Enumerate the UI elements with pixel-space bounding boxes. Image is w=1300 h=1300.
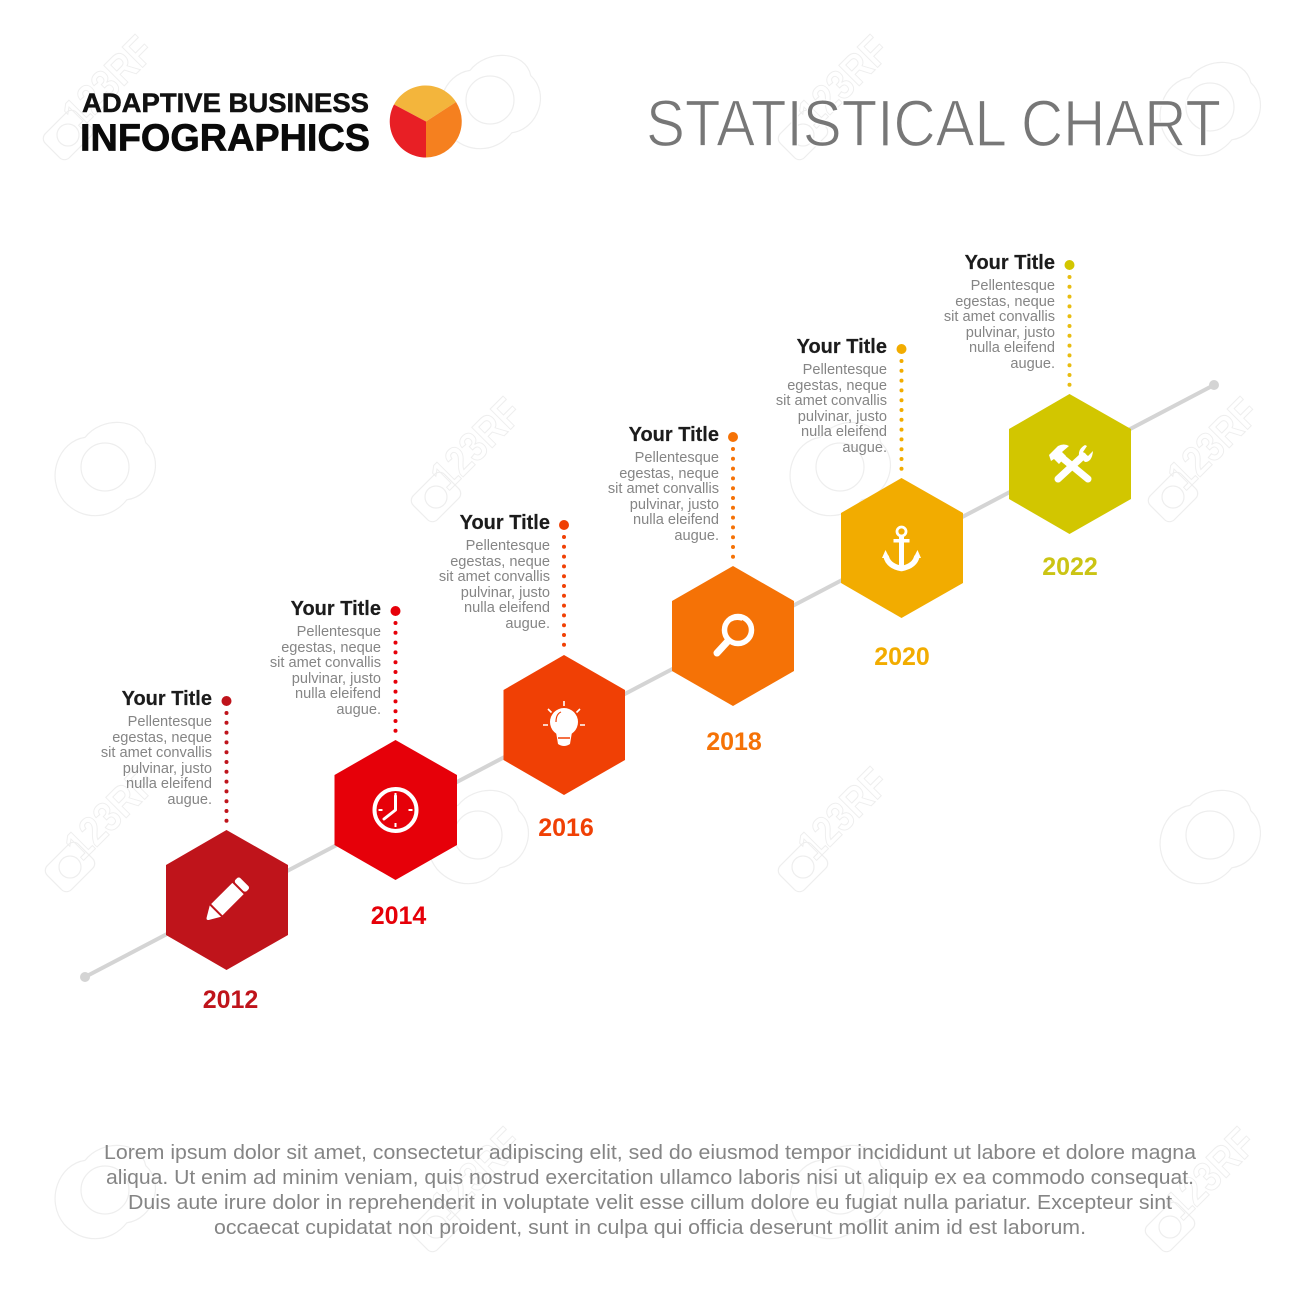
icon: pencil: [201, 876, 250, 925]
2022 hexagon: [1009, 394, 1131, 534]
2012 text block: sit amet convallis: [101, 745, 212, 761]
2016 text block: augue.: [505, 616, 550, 632]
2012 text block: [101, 688, 212, 808]
2018 text block: sit amet convallis: [608, 481, 719, 497]
watermark pattern: 123RF: [788, 27, 898, 136]
icon: logo pie: [390, 85, 462, 158]
2016 hexagon: [504, 655, 625, 795]
2018 text block: pulvinar, justo: [630, 497, 719, 513]
2016 text block: [439, 512, 550, 632]
icon: clock: [374, 789, 416, 831]
2020 year: 2020: [874, 643, 930, 671]
2020 text block: sit amet convallis: [776, 393, 887, 409]
2016 text block: Your Title: [460, 512, 550, 534]
footer paragraph: occaecat cupidatat non proident, sunt in culpa qui officia deserunt mollit anim id est laborum.: [214, 1217, 1086, 1239]
2014 text block: egestas, neque: [281, 640, 381, 656]
2022 text block: Your Title: [965, 252, 1055, 274]
2022 connector: [1064, 260, 1074, 386]
icon: light bulb: [543, 701, 585, 746]
watermark pattern: 123RF: [421, 1119, 531, 1228]
watermark pattern: 123RF: [1158, 389, 1268, 498]
2018 text block: [608, 424, 719, 544]
2016 text block: sit amet convallis: [439, 569, 550, 585]
footer paragraph: [104, 1142, 1197, 1239]
2016 text block: pulvinar, justo: [461, 585, 550, 601]
logo title: INFOGRAPHICS: [80, 118, 370, 160]
2016 text block: egestas, neque: [450, 554, 550, 570]
2020 text block: [776, 336, 887, 456]
logo title: ADAPTIVE BUSINESS: [82, 88, 369, 118]
2012 text block: nulla eleifend: [126, 776, 212, 792]
2014 text block: nulla eleifend: [295, 686, 381, 702]
watermark pattern: 123RF: [421, 389, 531, 498]
milestone 2018: [608, 424, 794, 756]
2014 text block: augue.: [336, 702, 381, 718]
2014 text block: pulvinar, justo: [292, 671, 381, 687]
2016 year: 2016: [538, 814, 594, 842]
2018 year: 2018: [706, 728, 762, 756]
2014 year: 2014: [371, 902, 426, 930]
2014 text block: Pellentesque: [297, 624, 381, 640]
2014 text block: [270, 598, 381, 718]
2016 text block: nulla eleifend: [464, 600, 550, 616]
2022 text block: sit amet convallis: [944, 309, 1055, 325]
icon: magnifier: [717, 616, 752, 653]
2014 text block: sit amet convallis: [270, 655, 381, 671]
2016 text block: Pellentesque: [466, 538, 550, 554]
2014 connector: [390, 606, 400, 732]
2014 text block: Your Title: [291, 598, 381, 620]
2012 connector: [222, 696, 232, 822]
2016 connector: [559, 520, 569, 646]
2018 text block: Pellentesque: [635, 450, 719, 466]
2022 text block: nulla eleifend: [969, 340, 1055, 356]
milestone 2014: [270, 598, 457, 930]
2020 text block: egestas, neque: [787, 378, 887, 394]
watermark pattern: 123RF: [53, 27, 163, 136]
milestone 2016: [439, 512, 625, 842]
milestone 2020: [776, 336, 963, 671]
milestone 2012: [101, 688, 288, 1014]
2022 text block: augue.: [1010, 356, 1055, 372]
2012 text block: augue.: [167, 792, 212, 808]
2012 hexagon: [166, 830, 288, 970]
2020 text block: nulla eleifend: [801, 424, 887, 440]
2018 text block: augue.: [674, 528, 719, 544]
2012 text block: egestas, neque: [112, 730, 212, 746]
2012 year: 2012: [203, 986, 258, 1014]
2022 text block: Pellentesque: [971, 278, 1055, 294]
icon: hammer and wrench: [1049, 444, 1093, 479]
2018 text block: nulla eleifend: [633, 512, 719, 528]
main heading: STATISTICAL CHART: [646, 86, 1221, 160]
2020 text block: Pellentesque: [803, 362, 887, 378]
2022 text block: pulvinar, justo: [966, 325, 1055, 341]
watermark pattern: 123RF: [1155, 1119, 1265, 1228]
2022 text block: [944, 252, 1055, 372]
2018 text block: egestas, neque: [619, 466, 719, 482]
2020 text block: pulvinar, justo: [798, 409, 887, 425]
2018 hexagon: [672, 566, 794, 706]
2012 text block: Pellentesque: [128, 714, 212, 730]
2014 hexagon: [334, 740, 457, 880]
2018 connector: [728, 432, 738, 558]
2012 text block: Your Title: [122, 688, 212, 710]
2020 hexagon: [841, 478, 963, 618]
2020 text block: Your Title: [797, 336, 887, 358]
watermark pattern: 123RF: [55, 759, 165, 868]
2022 text block: egestas, neque: [955, 294, 1055, 310]
2020 connector: [896, 344, 906, 470]
timeline axis: [80, 380, 1219, 982]
2022 year: 2022: [1042, 553, 1098, 581]
footer paragraph: Lorem ipsum dolor sit amet, consectetur adipiscing elit, sed do eiusmod tempor incididunt ut labore et dolore magna: [104, 1142, 1197, 1164]
2012 text block: pulvinar, justo: [123, 761, 212, 777]
2020 text block: augue.: [842, 440, 887, 456]
footer paragraph: Duis aute irure dolor in reprehenderit in voluptate velit esse cillum dolore eu fugiat nulla pariatur. Excepteur sint: [128, 1192, 1172, 1214]
footer paragraph: aliqua. Ut enim ad minim veniam, quis nostrud exercitation ullamco laboris nisi ut aliquip ex ea commodo consequat.: [106, 1167, 1194, 1189]
milestone 2022: [944, 252, 1131, 581]
watermark pattern: 123RF: [788, 759, 898, 868]
logo title: [80, 88, 370, 160]
icon: anchor: [882, 527, 921, 568]
2018 text block: Your Title: [629, 424, 719, 446]
